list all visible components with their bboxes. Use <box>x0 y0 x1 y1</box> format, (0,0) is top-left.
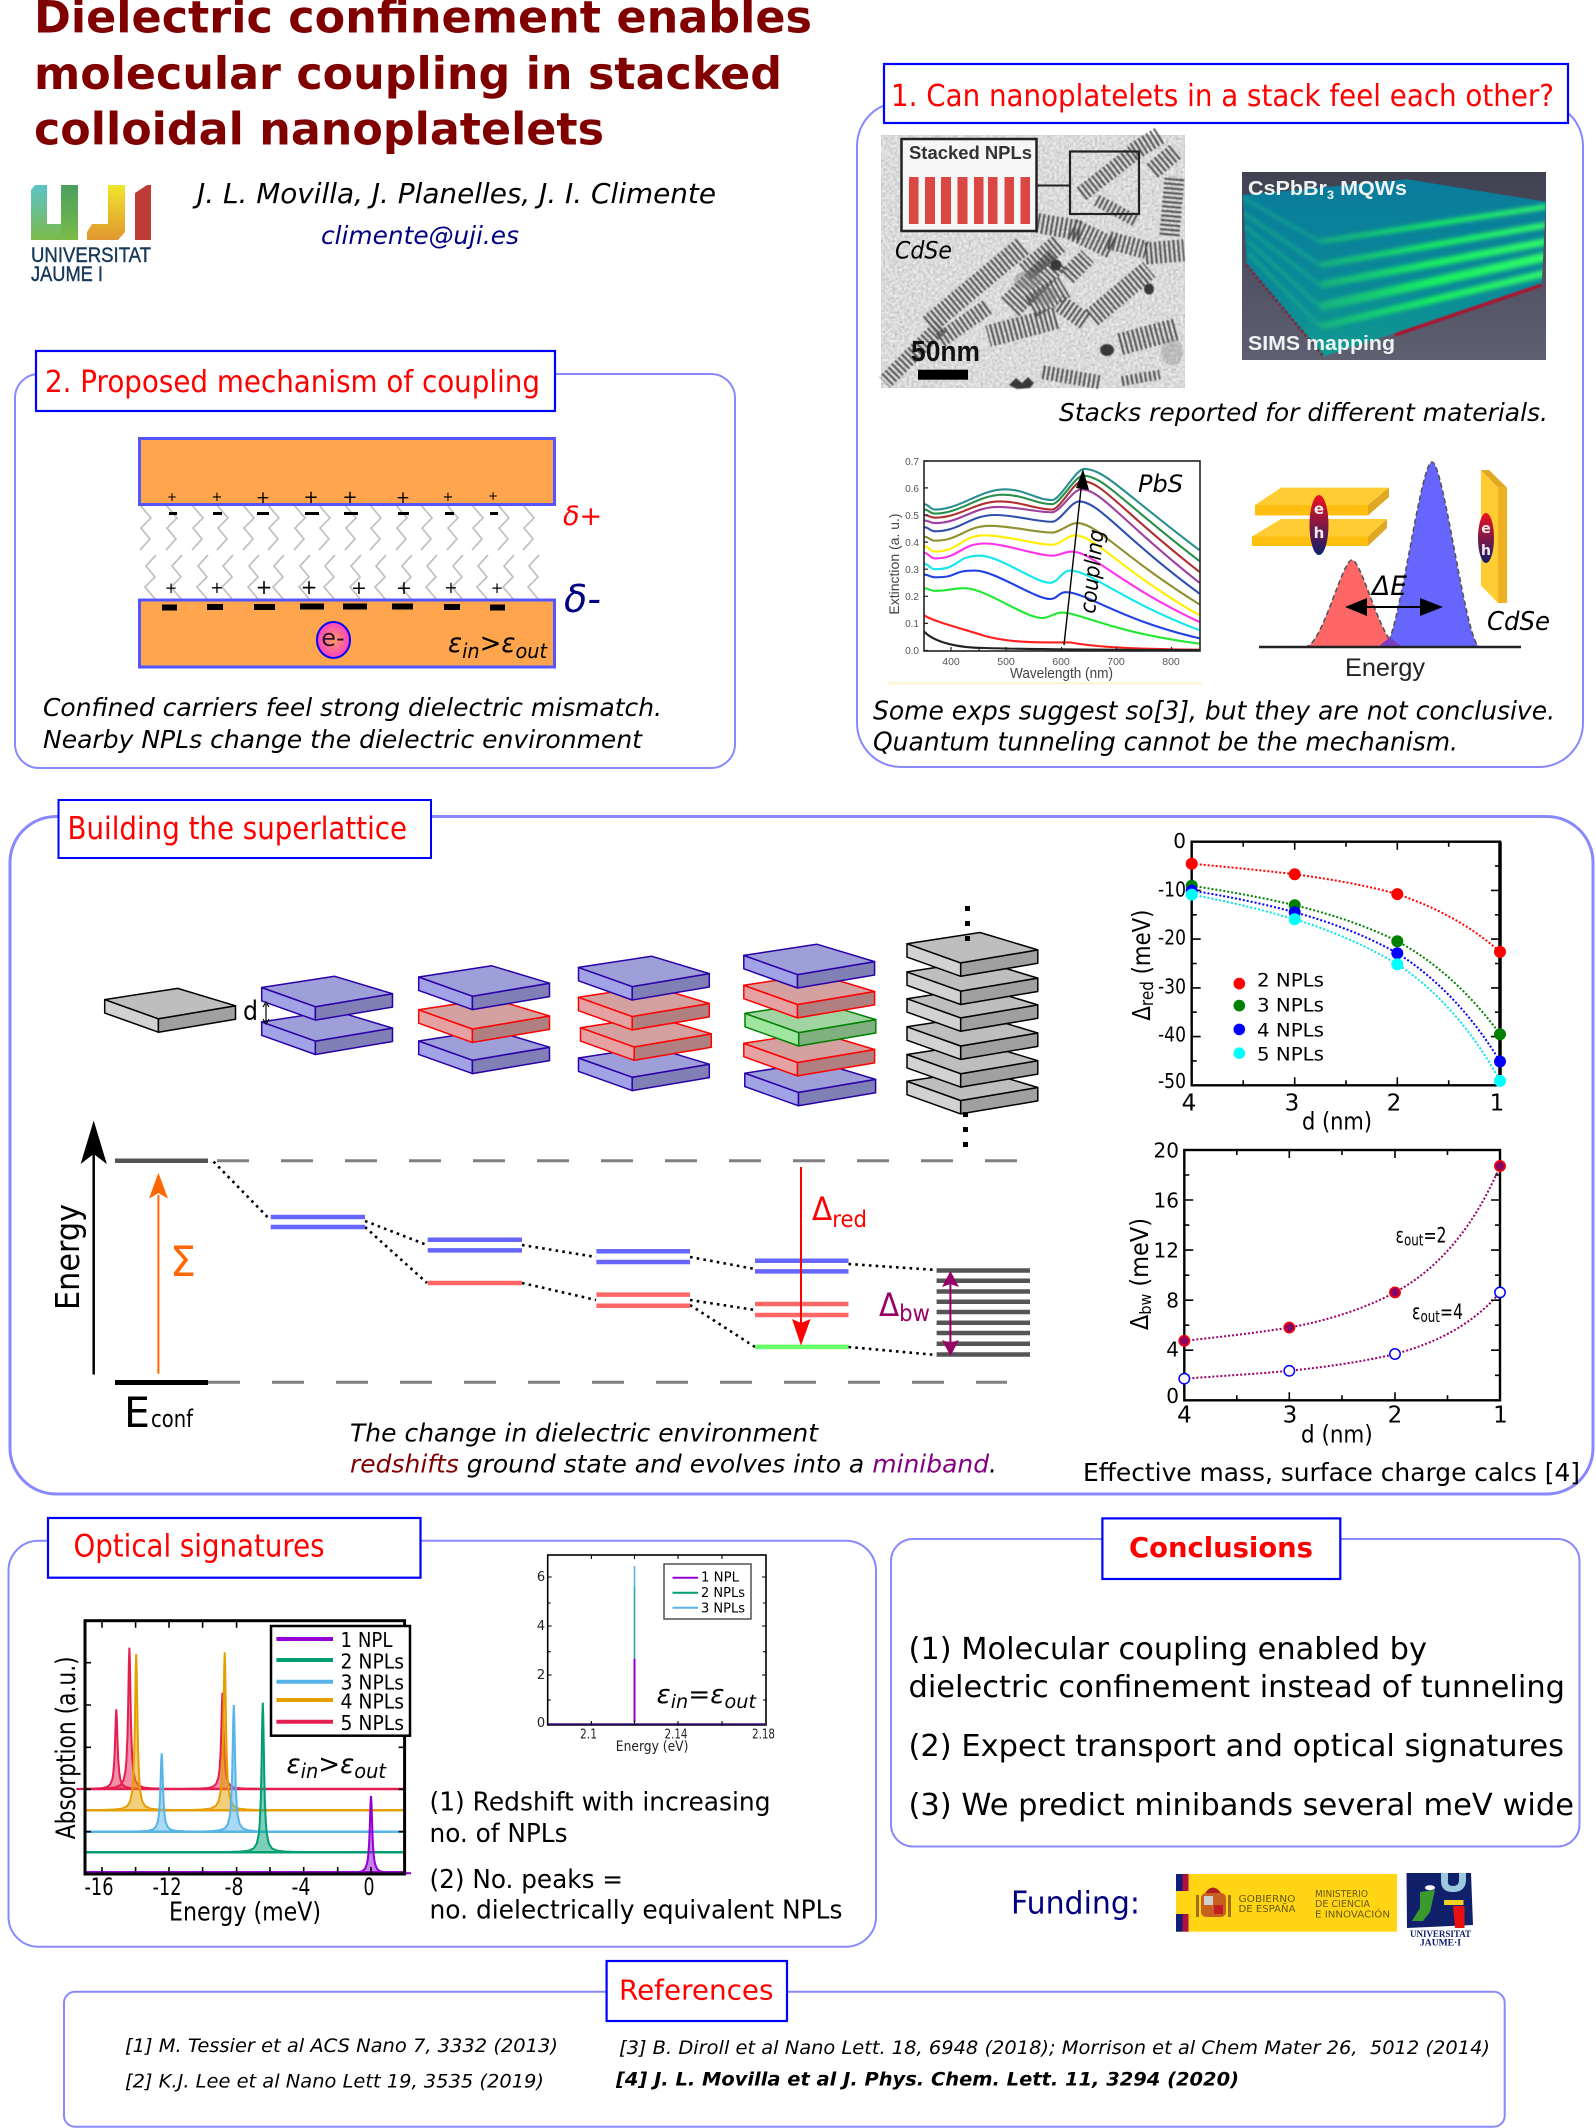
image: SIMS mapping of CsPbBr3 multiple quantum wells: 3 <box>1327 188 1334 202</box>
chart: bandwidth vs distance: bw <box>1136 1294 1155 1315</box>
text: conclusions list: dielectric confinement instead of tunneling <box>908 1670 1565 1705</box>
chart: PbS extinction spectra: 0.5 <box>905 511 919 522</box>
legend: absorption series: 5 NPLs <box>340 1711 404 1735</box>
chart: redshift vs distance: -30 <box>1158 974 1186 998</box>
image: TEM micrograph of CdSe stacks: 50nm <box>911 336 980 368</box>
icon: stacked yellow plates: e <box>1314 500 1324 518</box>
diagram: ligand chains between two platelets: + <box>301 575 317 599</box>
chart: redshift vs distance: -20 <box>1158 926 1186 950</box>
heading: proposed mechanism <box>36 351 555 411</box>
heading: building the superlattice: Building the superlattice <box>68 811 407 847</box>
label: sigma: Σ <box>170 1237 196 1286</box>
chart: absorption spectra epsilon in greater than out: -8 <box>224 1873 244 1901</box>
label: delta minus: δ- <box>564 577 601 621</box>
text: optical conclusions: no. of NPLs <box>430 1819 568 1849</box>
icon: single vertical plate: h <box>1481 543 1491 559</box>
legend: absorption series <box>271 1626 410 1736</box>
legend: absorption series: 4 NPLs <box>340 1690 404 1714</box>
diagram: ligand chains between two platelets: + <box>443 490 453 505</box>
caption: stacks reported: Stacks reported for different materials. <box>1059 398 1548 427</box>
icon: Spanish ministry logo: E INNOVACIÓN <box>1315 1908 1390 1920</box>
text: superlattice caption: The change in dielectric environment <box>350 1418 819 1448</box>
diagram: ligand chains between two platelets: + <box>256 488 270 508</box>
legend: inset series: 3 NPLs <box>701 1602 745 1616</box>
label: E conf: E <box>124 1388 150 1437</box>
label: epsilon in greater than epsilon out: >ε <box>480 628 515 659</box>
icon: single vertical plate <box>1478 470 1507 603</box>
chart: redshift vs distance: 3 NPLs <box>1257 994 1324 1016</box>
chart: bandwidth vs distance: d (nm) <box>1301 1420 1373 1448</box>
arrow: delta bandwidth <box>942 1271 959 1356</box>
chart: bandwidth vs distance: 12 <box>1154 1238 1179 1262</box>
image: SIMS mapping of CsPbBr3 multiple quantum wells: CsPbBr <box>1248 178 1321 200</box>
chart: absorption spectra epsilon in greater than out: Absorption (a.u.) <box>51 1656 82 1839</box>
panel: conclusions <box>891 1518 1580 1846</box>
chart: absorption spectra epsilon in greater than out <box>51 1621 411 1928</box>
title: colloidal nanoplatelets <box>34 104 604 156</box>
chart: absorption spectra epsilon in equal out: 0 <box>537 1716 545 1731</box>
heading: proposed mechanism: 2. Proposed mechanism of coupling <box>45 365 540 400</box>
diagram: ligand chains between two platelets: + <box>351 577 367 599</box>
image: SIMS mapping of CsPbBr3 multiple quantum wells: MQWs <box>1334 178 1407 200</box>
label: delta plus: δ+ <box>563 501 602 532</box>
chart: absorption spectra epsilon in equal out: 2.14 <box>664 1728 688 1742</box>
chart: bandwidth vs distance: ε <box>1412 1300 1423 1324</box>
diagram: molecular peaks vs energy: ΔE <box>1370 571 1407 602</box>
icon: Universitat Jaume I crest: JAUME·I <box>1420 1938 1462 1948</box>
icon: UJI university logo: JAUME I <box>31 263 103 286</box>
chart: PbS extinction spectra: 0.2 <box>905 592 919 603</box>
legend: inset series: 1 NPL <box>701 1570 740 1586</box>
text: reference list: [3] B. Diroll et al Nano Lett. 18, 6948 (2018); Morrison et al Chem Mater 26, 5012 (2014) <box>619 2037 1490 2059</box>
diagram: nanoplatelet stacks: d <box>243 996 258 1027</box>
label: epsilon in equal out: out <box>725 1691 758 1713</box>
chart: bandwidth vs distance: 4 <box>1166 1338 1179 1362</box>
heading: can nanoplatelets feel each other: 1. Can nanoplatelets in a stack feel each other? <box>891 79 1554 114</box>
chart: redshift vs distance: -50 <box>1158 1069 1186 1093</box>
label: delta bandwidth: bw <box>899 1301 930 1327</box>
chart: PbS extinction spectra: 500 <box>997 656 1015 668</box>
panel: optical signatures <box>8 1518 876 1947</box>
diagram: ligand chains between two platelets: + <box>256 575 272 599</box>
chart: bandwidth vs distance: 2 <box>1388 1402 1402 1428</box>
icon: Spanish ministry logo <box>1176 1874 1397 1932</box>
text: optical conclusions: (1) Redshift with increasing <box>430 1788 770 1818</box>
image: SIMS mapping of CsPbBr3 multiple quantum wells: SIMS mapping <box>1248 333 1395 355</box>
chart: PbS extinction spectra: Extinction (a. u.) <box>886 513 902 615</box>
diagram: ligand chains between two platelets: + <box>491 579 503 597</box>
icon: Universitat Jaume I crest <box>1406 1873 1473 1948</box>
chart: PbS extinction spectra: 0.1 <box>905 619 919 630</box>
diagram: ligand chains between two platelets: + <box>167 490 177 504</box>
chart: redshift vs distance: 2 <box>1387 1090 1401 1116</box>
text: optical conclusions: no. dielectrically equivalent NPLs <box>430 1896 842 1926</box>
text: reference list: [2] K.J. Lee et al Nano Lett 19, 3535 (2019) <box>125 2070 544 2092</box>
chart: redshift vs distance: red <box>1137 981 1158 1006</box>
diagram: energy levels <box>48 1120 1030 1437</box>
label: conf subscript: conf <box>151 1405 193 1433</box>
diagram: molecular peaks vs energy: Energy <box>1345 654 1425 682</box>
diagram: ligand chains between two platelets: + <box>303 487 319 508</box>
chart: bandwidth vs distance: 20 <box>1154 1138 1179 1162</box>
chart: bandwidth vs distance: 4 <box>1177 1402 1192 1428</box>
text: mechanism caption: Nearby NPLs change the dielectric environment <box>43 725 643 754</box>
legend: absorption series: 3 NPLs <box>340 1670 404 1694</box>
chart: redshift vs distance: 4 NPLs <box>1257 1020 1324 1042</box>
icon: electron: e- <box>321 624 345 652</box>
image: TEM micrograph of CdSe stacks <box>879 127 1185 389</box>
image: SIMS mapping of CsPbBr3 multiple quantum wells <box>1242 172 1546 360</box>
chart: bandwidth vs distance: (meV) <box>1125 1218 1154 1294</box>
label: epsilon in equal out: =ε <box>688 1680 725 1710</box>
heading: building the superlattice <box>58 800 431 858</box>
diagram: molecular peaks vs energy <box>1252 462 1550 682</box>
legend: inset series <box>664 1564 751 1619</box>
heading: references <box>607 1961 787 2021</box>
label: epsilon in greater than out: ε <box>286 1749 301 1780</box>
chart: PbS extinction spectra: 600 <box>1052 656 1070 668</box>
chart: bandwidth vs distance: 1 <box>1493 1402 1508 1428</box>
label: epsilon in equal out: in <box>671 1691 688 1713</box>
chart: bandwidth vs distance <box>1125 1138 1508 1448</box>
chart: redshift vs distance: 5 NPLs <box>1257 1044 1324 1066</box>
chart: redshift vs distance: -40 <box>1158 1022 1186 1046</box>
text: conclusions list: (2) Expect transport and optical signatures <box>908 1729 1564 1764</box>
icon: Universitat Jaume I crest: UNIVERSITAT <box>1410 1929 1471 1939</box>
panel: building the superlattice <box>10 800 1593 1494</box>
image: TEM micrograph of CdSe stacks: CdSe <box>895 236 952 264</box>
chart: redshift vs distance <box>1127 829 1506 1136</box>
label: epsilon in greater than epsilon out: ε <box>448 628 463 659</box>
diagram: ligand chains between two platelets: + <box>488 489 498 503</box>
arrow: confinement energy <box>149 1173 168 1374</box>
icon: Spanish ministry logo: GOBIERNO <box>1238 1894 1296 1905</box>
chart: PbS extinction spectra: 0.6 <box>905 484 919 495</box>
text: conclusions list: (3) We predict minibands several meV wide <box>908 1788 1574 1823</box>
text: superlattice caption: redshifts ground state and evolves into a miniband. <box>350 1450 997 1479</box>
text: experiments caption <box>873 696 1555 758</box>
text: mechanism caption <box>43 693 662 754</box>
heading: optical signatures: Optical signatures <box>74 1528 324 1564</box>
diagram: ligand chains between two platelets: + <box>396 577 412 599</box>
chart: bandwidth vs distance: out <box>1420 1307 1440 1326</box>
diagram: ligand chains between two platelets: + <box>165 579 177 597</box>
image: TEM micrograph of CdSe stacks: Stacked NPLs <box>909 143 1032 163</box>
chart: absorption spectra epsilon in equal out: 2.1 <box>580 1728 597 1742</box>
email: climente@uji.es <box>321 221 519 250</box>
chart: PbS extinction spectra: PbS <box>1138 470 1183 498</box>
label: delta red: red <box>832 1207 867 1233</box>
text: experiments caption: Some exps suggest so[3], but they are not conclusive. <box>873 696 1555 726</box>
arrow: delta red <box>792 1167 811 1346</box>
panel: 1. can nanoplatelets feel each other <box>857 64 1583 767</box>
chart: PbS extinction spectra: 0.3 <box>905 565 919 576</box>
chart: absorption spectra epsilon in greater than out: 0 <box>364 1873 374 1901</box>
chart: bandwidth vs distance: ε <box>1396 1224 1407 1248</box>
text: conclusions list: (1) Molecular coupling enabled by <box>908 1632 1427 1667</box>
heading: optical signatures <box>48 1518 420 1578</box>
icon: Spanish ministry logo: DE CIENCIA <box>1315 1899 1370 1910</box>
authors: J. L. Movilla, J. Planelles, J. I. Climente <box>192 177 716 210</box>
diagram: ligand chains between two platelets: + <box>212 490 222 505</box>
funding label: Funding: <box>1011 1886 1140 1922</box>
chart: PbS extinction spectra: 400 <box>942 656 960 668</box>
icon: Spanish ministry logo: MINISTERIO <box>1315 1889 1368 1900</box>
diagram: nanoplatelet stacks <box>105 906 1038 1147</box>
diagram: ligand chains between two platelets: + <box>342 487 358 508</box>
panel: references <box>64 1961 1505 2127</box>
text: reference list: [4] J. L. Movilla et al J. Phys. Chem. Lett. 11, 3294 (2020) <box>615 2068 1239 2090</box>
chart: redshift vs distance: 1 <box>1490 1090 1504 1116</box>
chart: absorption spectra epsilon in equal out: 2.18 <box>752 1728 775 1742</box>
icon: UJI university logo <box>31 185 151 286</box>
chart: PbS extinction spectra: 0.7 <box>905 457 919 468</box>
chart: bandwidth vs distance: 8 <box>1166 1288 1179 1312</box>
chart: PbS extinction spectra: 0.4 <box>905 538 919 549</box>
chart: bandwidth vs distance: 3 <box>1283 1402 1297 1428</box>
chart: bandwidth vs distance: 16 <box>1154 1188 1179 1212</box>
arrow: energy axis <box>81 1120 107 1374</box>
label: epsilon in greater than out: in <box>301 1759 318 1783</box>
chart: absorption spectra epsilon in equal out: 2 <box>537 1668 545 1683</box>
heading: references: References <box>619 1974 774 2006</box>
diagram: ligand chains between two platelets: + <box>396 488 410 508</box>
diagram: ligand chains between two platelets: + <box>444 578 458 597</box>
label: epsilon in equal out: ε <box>656 1680 671 1710</box>
title: molecular coupling in stacked <box>34 49 782 100</box>
chart: redshift vs distance: d (nm) <box>1302 1108 1372 1136</box>
chart: absorption spectra epsilon in greater than out: -4 <box>292 1873 310 1901</box>
heading: can nanoplatelets feel each other <box>884 64 1568 123</box>
heading: conclusions <box>1102 1518 1340 1579</box>
chart: redshift vs distance: (meV) <box>1127 910 1156 981</box>
label: delta bandwidth: Δ <box>879 1286 901 1324</box>
icon: stacked yellow plates: h <box>1314 524 1324 542</box>
text: optical conclusions <box>430 1788 842 1926</box>
chart: absorption spectra epsilon in equal out: 6 <box>537 1570 545 1585</box>
icon: electron <box>317 622 350 658</box>
chart: PbS extinction spectra: 700 <box>1107 656 1125 668</box>
text: conclusions list <box>908 1632 1574 1823</box>
heading: conclusions: Conclusions <box>1129 1531 1313 1564</box>
icon: Spanish ministry logo: DE ESPAÑA <box>1238 1902 1296 1915</box>
diagram: molecular peaks vs energy: CdSe <box>1487 607 1550 637</box>
text: experiments caption: Quantum tunneling cannot be the mechanism. <box>873 728 1458 758</box>
label: delta red: Δ <box>812 1190 834 1228</box>
chart: absorption spectra epsilon in equal out: 4 <box>537 1619 545 1634</box>
icon: single vertical plate: e <box>1481 521 1491 537</box>
chart: absorption spectra epsilon in equal out <box>537 1555 775 1755</box>
chart: PbS extinction spectra <box>886 457 1202 684</box>
chart: redshift vs distance: Δ <box>1127 1003 1156 1021</box>
label: epsilon in greater than out: out <box>354 1759 387 1783</box>
label: epsilon in greater than epsilon out: out <box>515 639 548 663</box>
chart: bandwidth vs distance: out <box>1404 1230 1423 1250</box>
chart: redshift vs distance: 0 <box>1173 829 1186 853</box>
text: mechanism caption: Confined carriers feel strong dielectric mismatch. <box>43 693 662 722</box>
label: epsilon in greater than epsilon out: in <box>462 639 480 663</box>
chart: redshift vs distance: 4 <box>1182 1090 1196 1116</box>
chart: PbS extinction spectra: Wavelength (nm) <box>1010 665 1113 682</box>
chart: absorption spectra epsilon in greater than out: -12 <box>152 1873 182 1901</box>
text: reference list <box>125 2035 1490 2092</box>
chart: bandwidth vs distance: Δ <box>1125 1313 1154 1330</box>
label: energy axis: Energy <box>48 1204 87 1310</box>
chart: absorption spectra epsilon in greater than out: -16 <box>84 1873 114 1901</box>
chart: bandwidth vs distance: =4 <box>1440 1300 1463 1324</box>
icon: stacked yellow plates <box>1252 488 1389 555</box>
text: superlattice caption <box>350 1418 997 1479</box>
chart: PbS extinction spectra: 800 <box>1162 656 1180 668</box>
text: reference list: [1] M. Tessier et al ACS Nano 7, 3332 (2013) <box>125 2035 558 2057</box>
panel: 2. proposed mechanism <box>15 351 735 768</box>
chart: bandwidth vs distance: 0 <box>1166 1384 1179 1408</box>
text: optical conclusions: (2) No. peaks = <box>430 1865 623 1895</box>
chart: redshift vs distance: 2 NPLs <box>1257 970 1324 992</box>
legend: absorption series: 1 NPL <box>340 1628 393 1652</box>
chart: PbS extinction spectra: 0.0 <box>905 646 919 657</box>
title <box>34 0 812 156</box>
text: calcs note: Effective mass, surface charge calcs [4] <box>1083 1458 1580 1487</box>
chart: absorption spectra epsilon in greater than out: Energy (meV) <box>169 1898 321 1928</box>
chart: PbS extinction spectra: coupling <box>1076 528 1110 615</box>
chart: redshift vs distance: 3 <box>1285 1090 1299 1116</box>
diagram: ligand chains between two platelets <box>140 438 554 667</box>
legend: absorption series: 2 NPLs <box>340 1650 404 1674</box>
diagram: ligand chains between two platelets: + <box>210 578 224 597</box>
chart: absorption spectra epsilon in equal out: Energy (eV) <box>616 1739 688 1755</box>
legend: inset series: 2 NPLs <box>701 1586 745 1601</box>
chart: redshift vs distance: -10 <box>1158 878 1186 902</box>
chart: bandwidth vs distance: =2 <box>1423 1224 1446 1248</box>
label: epsilon in greater than out: >ε <box>318 1749 354 1780</box>
icon: UJI university logo: UNIVERSITAT <box>31 244 151 267</box>
